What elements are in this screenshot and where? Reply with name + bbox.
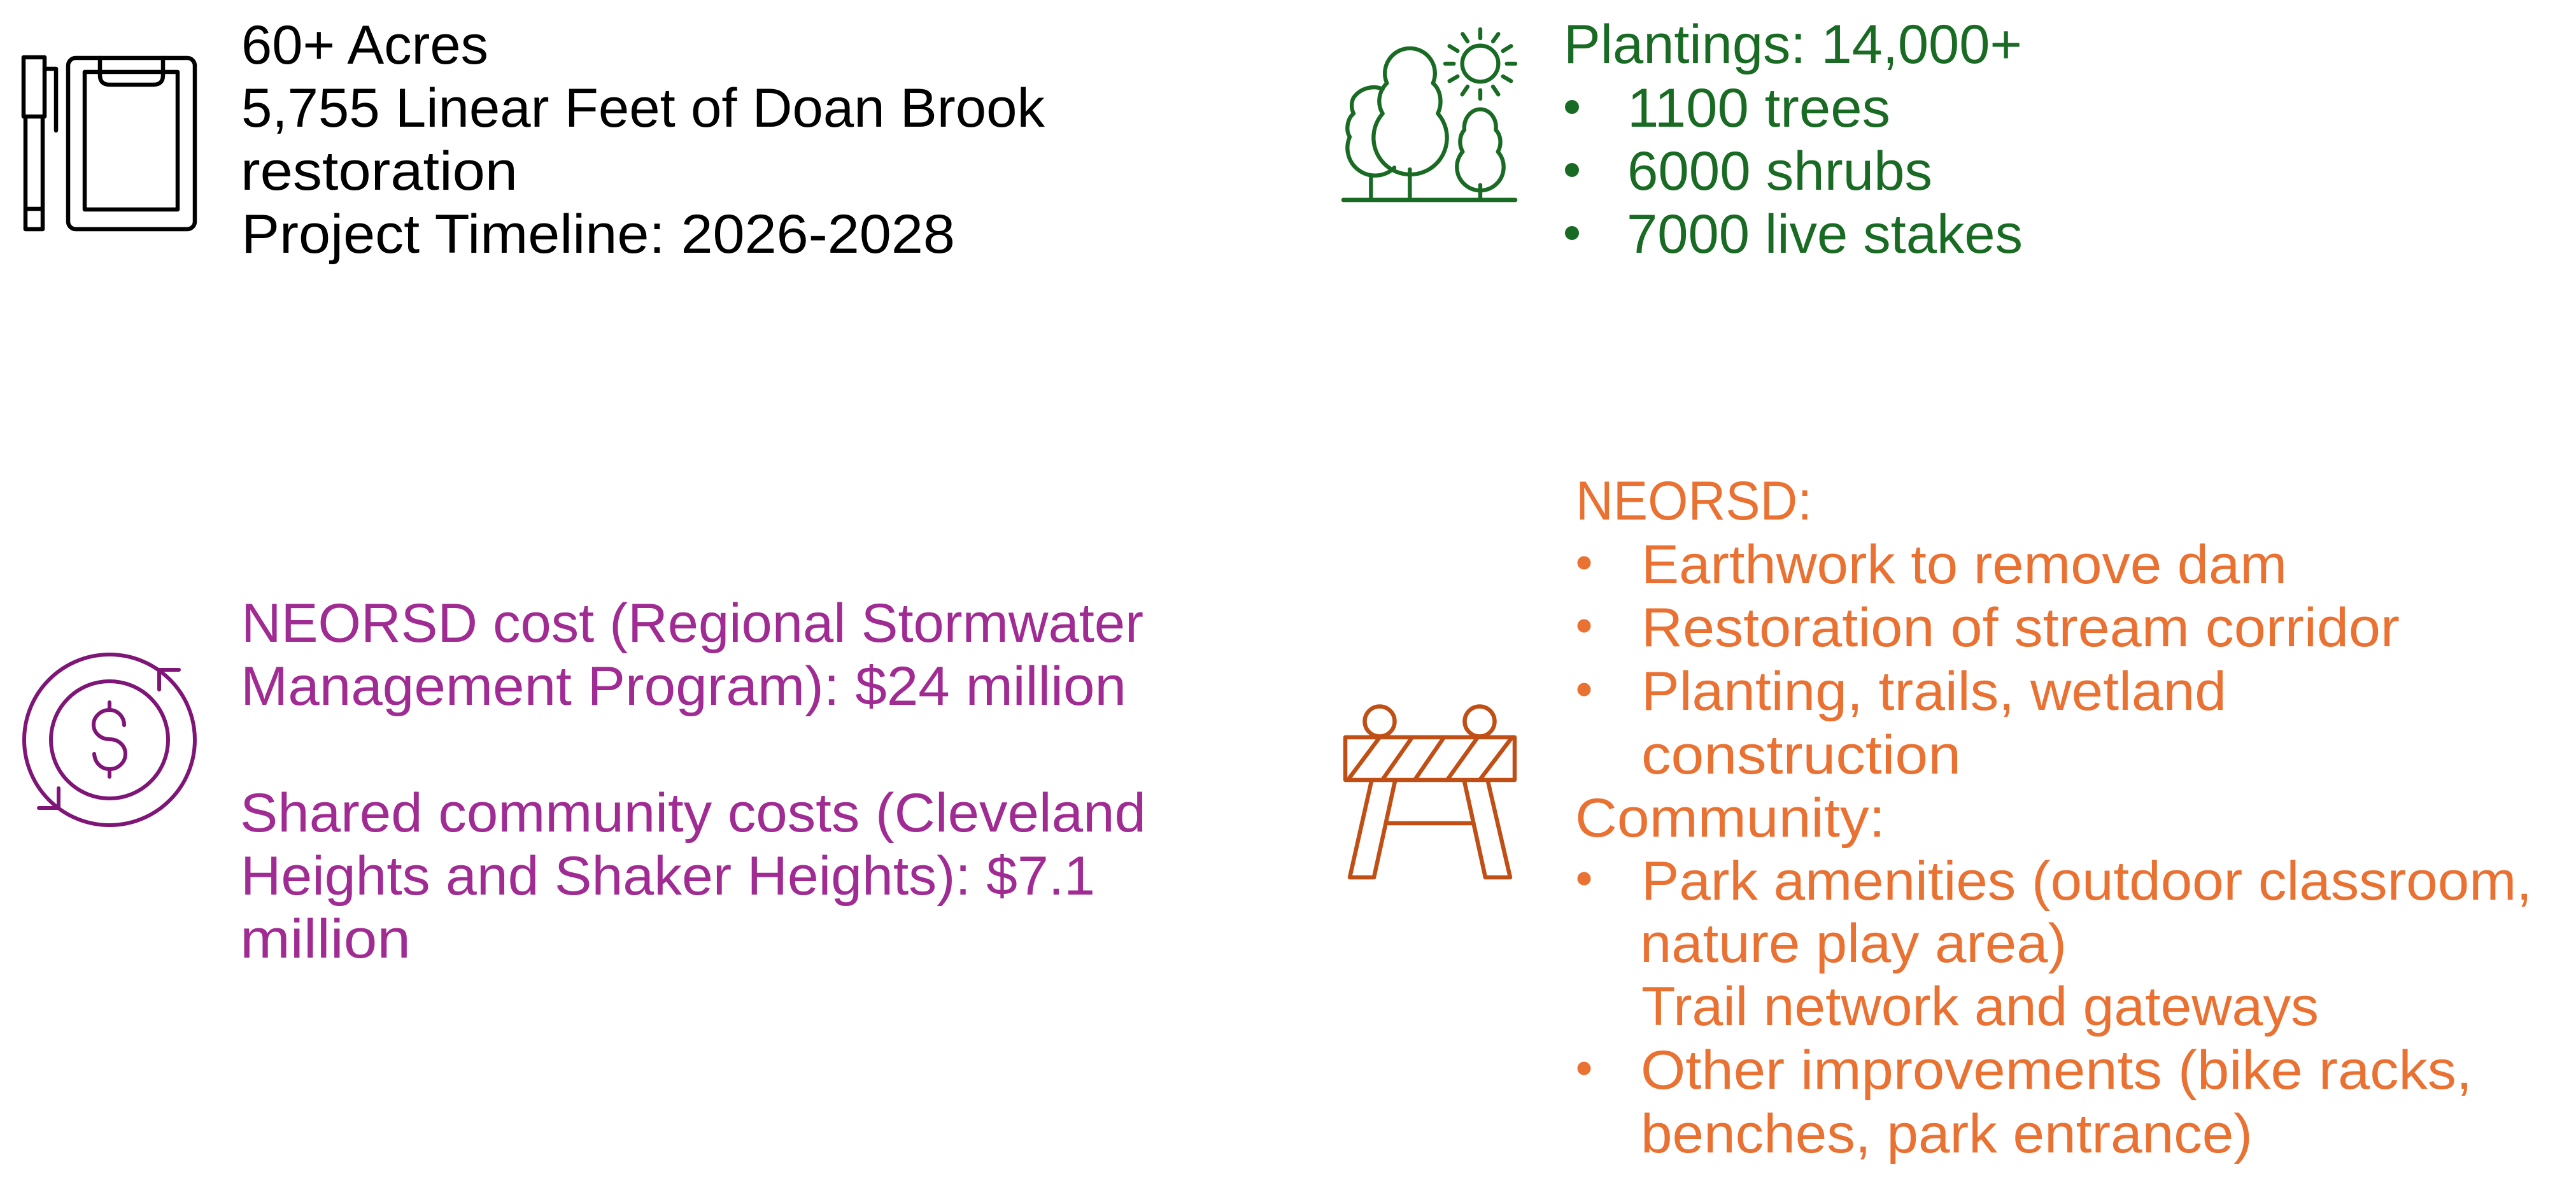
icon: trees and sun	[1343, 29, 1515, 200]
panel: construction scope	[1345, 471, 2532, 1165]
text: NEORSD and community work items: benches, park entrance)	[1641, 1103, 2253, 1165]
text: NEORSD and community work items: construction	[1641, 725, 1961, 786]
text: NEORSD and community work items: nature play area)	[1640, 913, 2067, 974]
text: NEORSD and community work items: Earthwork to remove dam	[1641, 534, 2287, 595]
text: NEORSD and community work items: Park amenities (outdoor classroom,	[1641, 851, 2532, 912]
text: planting counts: 6000 shrubs	[1627, 141, 1932, 202]
text: NEORSD and community work items: Community:	[1575, 788, 1885, 849]
text: planting counts: 1100 trees	[1627, 78, 1890, 139]
text: cost breakdown: Heights and Shaker Heights): $7.1	[241, 846, 1095, 907]
text: NEORSD and community work items: Trail network and gateways	[1641, 976, 2319, 1037]
text: cost breakdown: Management Program): $24 million	[241, 656, 1126, 717]
text: NEORSD and community work items: Other improvements (bike racks,	[1641, 1040, 2472, 1101]
text: cost breakdown: million	[240, 909, 411, 970]
text: planting counts: 7000 live stakes	[1627, 204, 2023, 265]
icon: dollar coin with circular arrows	[24, 655, 195, 825]
text: planting counts: Plantings: 14,000+	[1564, 14, 2022, 75]
text: NEORSD and community work items: Restoration of stream corridor	[1641, 597, 2400, 658]
panel: plantings	[1343, 14, 2023, 265]
text: project scope figures: 60+ Acres	[241, 15, 488, 76]
text: cost breakdown: NEORSD cost (Regional Stormwater	[241, 593, 1143, 654]
icon: road barrier	[1345, 707, 1515, 877]
text: project scope figures	[241, 15, 1045, 265]
text: project scope figures: 5,755 Linear Feet of Doan Brook	[241, 78, 1045, 139]
icon: clipboard and pen	[24, 57, 195, 229]
text: NEORSD and community work items: NEORSD:	[1576, 471, 1812, 532]
text: project scope figures: restoration	[241, 141, 518, 202]
text: project scope figures: Project Timeline: 2026-2028	[241, 204, 955, 265]
text: NEORSD and community work items: Planting, trails, wetland	[1641, 661, 2226, 722]
text: NEORSD and community work items	[1575, 471, 2532, 1165]
text: cost breakdown: Shared community costs (Cleveland	[240, 783, 1146, 844]
text: planting counts	[1564, 14, 2023, 265]
text: cost breakdown	[240, 593, 1146, 970]
panel: costs	[24, 593, 1146, 970]
panel: project scope	[24, 15, 1045, 265]
